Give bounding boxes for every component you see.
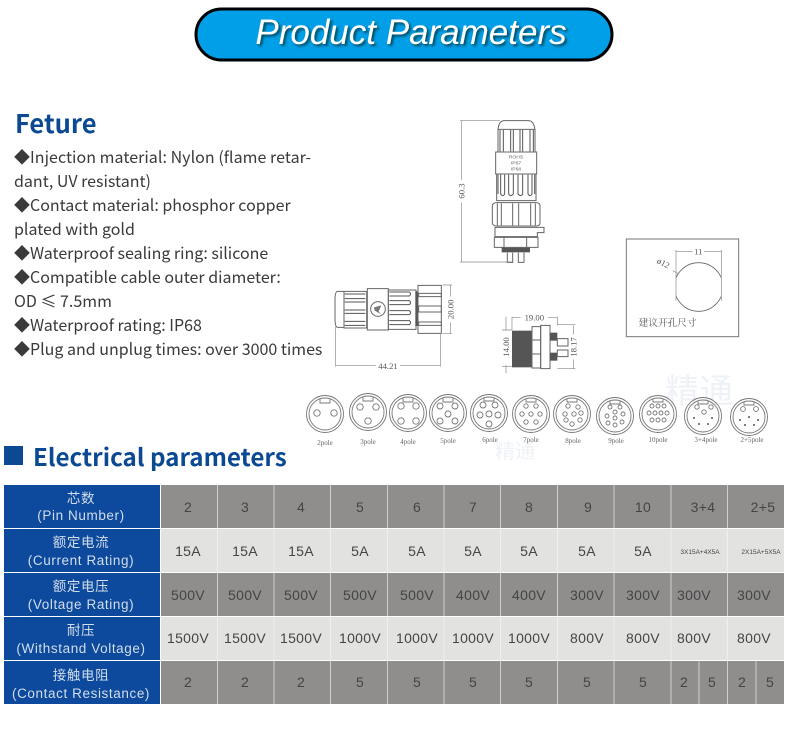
values: contact resistance: 5 — [356, 674, 364, 690]
values: voltage rating: 400V — [456, 587, 490, 603]
pole: 6: 6pole — [482, 436, 498, 444]
values: pin number: 3 — [241, 499, 249, 515]
drawing: horizontal connector — [335, 285, 456, 371]
row header: withstand voltage: 耐压 — [67, 623, 95, 638]
feature list: OD ≤ 7.5mm — [14, 288, 112, 312]
feature list: plated with gold — [14, 216, 135, 240]
values: contact resistance: 5 — [639, 674, 647, 690]
values: pin number: 9 — [584, 499, 592, 515]
values: pin number: 2 — [184, 499, 192, 515]
pole: 6 — [470, 394, 508, 444]
row header: withstand voltage: (Withstand Voltage) — [16, 641, 146, 656]
values: pin number: 7 — [469, 499, 477, 515]
drawing: vertical connector: ROHS — [509, 154, 524, 160]
feature list: dant, UV resistant) — [14, 168, 151, 192]
pole: 3+4 — [684, 398, 722, 444]
title banner: Product Parameters — [255, 13, 567, 52]
drawing: panel socket: 19.00 — [525, 313, 544, 323]
row header: pin number: 芯数 — [67, 491, 95, 506]
values: pin number: 10 — [635, 499, 651, 515]
dimension drawings — [335, 121, 739, 373]
values: voltage rating: 500V — [284, 587, 318, 603]
background watermark: 精通 — [665, 364, 733, 413]
values: withstand voltage: 1000V — [339, 630, 381, 646]
row header: contact resistance: 接触电阻 — [53, 667, 109, 683]
values: current rating — [175, 543, 781, 559]
drawing: panel socket: 18.17 — [568, 337, 578, 357]
pole: 10: 10pole — [648, 436, 668, 444]
row header: pin number — [4, 485, 160, 528]
background watermark: 精通 — [495, 435, 535, 464]
row header: current rating: 额定电流 — [53, 535, 109, 550]
pole: 3 — [350, 394, 386, 446]
values: voltage rating: 400V — [512, 587, 546, 603]
values: voltage rating: 300V — [570, 587, 604, 603]
values: contact resistance — [184, 674, 774, 690]
values: contact resistance: 2 — [184, 674, 192, 690]
values: pin number — [184, 499, 775, 515]
pole: 3+4: 3+4pole — [694, 436, 718, 444]
values: pin number: 5 — [356, 499, 364, 515]
values: current rating: 5A — [351, 543, 369, 559]
values: withstand voltage: 800V — [677, 630, 711, 646]
pole: 5 — [430, 394, 466, 445]
row header: contact resistance — [4, 661, 160, 704]
pole: 4 — [390, 394, 426, 446]
values: pin number: 3+4 — [691, 499, 715, 515]
electrical heading: Electrical parameters — [33, 438, 287, 473]
pole: 9: 9pole — [608, 437, 624, 445]
values: voltage rating: 500V — [343, 587, 377, 603]
pole: 7: 7pole — [523, 436, 539, 444]
values: voltage rating: 500V — [171, 587, 205, 603]
values: contact resistance: 5 — [525, 674, 533, 690]
row header: current rating — [4, 529, 160, 572]
values: contact resistance: 2 — [680, 674, 688, 690]
values: current rating: 3X15A+4X5A — [680, 549, 720, 556]
row header: current rating: (Current Rating) — [28, 553, 134, 568]
values: contact resistance: 5 — [708, 674, 716, 690]
values: current rating: 5A — [464, 543, 482, 559]
pole: 8 — [554, 396, 590, 445]
values: current rating: 15A — [288, 543, 314, 559]
values: withstand voltage: 1000V — [452, 630, 494, 646]
values: current rating: 15A — [232, 543, 258, 559]
row header: contact resistance: (Contact Resistance) — [12, 686, 150, 701]
feature list — [14, 144, 322, 360]
values: withstand voltage: 800V — [737, 630, 771, 646]
values: withstand voltage: 1500V — [167, 630, 209, 646]
pole: 10 — [640, 396, 676, 444]
values: contact resistance: 2 — [738, 674, 746, 690]
values: current rating: 5A — [578, 543, 596, 559]
pole: 2: 2pole — [317, 439, 333, 447]
pole: 2 — [306, 396, 344, 447]
pole diagrams — [306, 394, 768, 447]
pole: 7 — [512, 396, 550, 444]
values: withstand voltage: 800V — [570, 630, 604, 646]
values: current rating: 5A — [634, 543, 652, 559]
pole: 4: 4pole — [400, 438, 416, 446]
values: voltage rating: 300V — [677, 587, 711, 603]
values: voltage rating — [171, 587, 771, 603]
row header: withstand voltage — [4, 617, 160, 660]
feature list: ◆Injection material: Nylon (flame retar- — [14, 144, 311, 168]
drawing: vertical connector: IP67 — [511, 160, 521, 166]
feature list: ◆Contact material: phosphor copper — [14, 192, 291, 216]
background watermark — [495, 364, 733, 464]
feature heading: Feture — [15, 104, 97, 141]
values: withstand voltage — [167, 630, 771, 646]
values: pin number: 8 — [525, 499, 533, 515]
drawing: vertical connector: 60.3 — [456, 183, 466, 199]
pole: 2+5: 2+5pole — [740, 436, 764, 444]
values: withstand voltage: 1500V — [280, 630, 322, 646]
drawing: panel socket: 14.00 — [501, 337, 511, 357]
pole: 8: 8pole — [565, 437, 581, 445]
title banner — [196, 9, 612, 60]
drawing: vertical connector: IP68 — [511, 166, 521, 172]
pole: 5: 5pole — [440, 437, 456, 445]
values: current rating: 5A — [408, 543, 426, 559]
values: pin number: 4 — [297, 499, 305, 515]
pole: 9 — [596, 398, 634, 445]
values: contact resistance: 2 — [297, 674, 305, 690]
values: voltage rating: 300V — [737, 587, 771, 603]
values: contact resistance: 5 — [766, 674, 774, 690]
drawing: horizontal connector: 44.21 — [378, 361, 398, 371]
drawing: recommended cutout: ø12 — [655, 256, 671, 270]
values: withstand voltage: 1000V — [396, 630, 438, 646]
values: voltage rating: 300V — [626, 587, 660, 603]
feature list: ◆Waterproof rating: IP68 — [14, 312, 202, 336]
drawing: recommended cutout: 11 — [694, 247, 703, 257]
values: voltage rating: 500V — [228, 587, 262, 603]
feature list: ◆Plug and unplug times: over 3000 times — [14, 336, 322, 360]
values: current rating: 2X15A+5X5A — [741, 549, 781, 556]
drawing: recommended cutout — [626, 239, 739, 337]
values: pin number: 2+5 — [751, 499, 775, 515]
pole: 3: 3pole — [360, 438, 376, 446]
values: contact resistance: 5 — [413, 674, 421, 690]
row header: voltage rating: 额定电压 — [53, 579, 109, 594]
drawing: panel socket — [501, 313, 578, 373]
values: contact resistance: 2 — [241, 674, 249, 690]
row header: pin number: (Pin Number) — [37, 508, 125, 523]
feature list: ◆Waterproof sealing ring: silicone — [14, 240, 268, 264]
electrical heading marker icon — [4, 446, 23, 465]
values: voltage rating: 500V — [400, 587, 434, 603]
table row backgrounds — [161, 485, 784, 704]
drawing: vertical connector — [456, 121, 544, 262]
values: withstand voltage: 800V — [626, 630, 660, 646]
values: current rating: 15A — [175, 543, 201, 559]
values: withstand voltage: 1500V — [224, 630, 266, 646]
feature list: ◆Compatible cable outer diameter: — [14, 264, 281, 288]
row header: voltage rating — [4, 573, 160, 616]
drawing: recommended cutout: 建议开孔尺寸 — [639, 315, 697, 329]
values: current rating: 5A — [520, 543, 538, 559]
values: contact resistance: 5 — [469, 674, 477, 690]
parameter table — [4, 485, 784, 704]
values: withstand voltage: 1000V — [508, 630, 550, 646]
row header: voltage rating: (Voltage Rating) — [28, 597, 134, 612]
values: contact resistance: 5 — [583, 674, 591, 690]
values: pin number: 6 — [413, 499, 421, 515]
pole: 2+5 — [730, 398, 768, 444]
drawing: horizontal connector: 20.00 — [446, 300, 456, 319]
